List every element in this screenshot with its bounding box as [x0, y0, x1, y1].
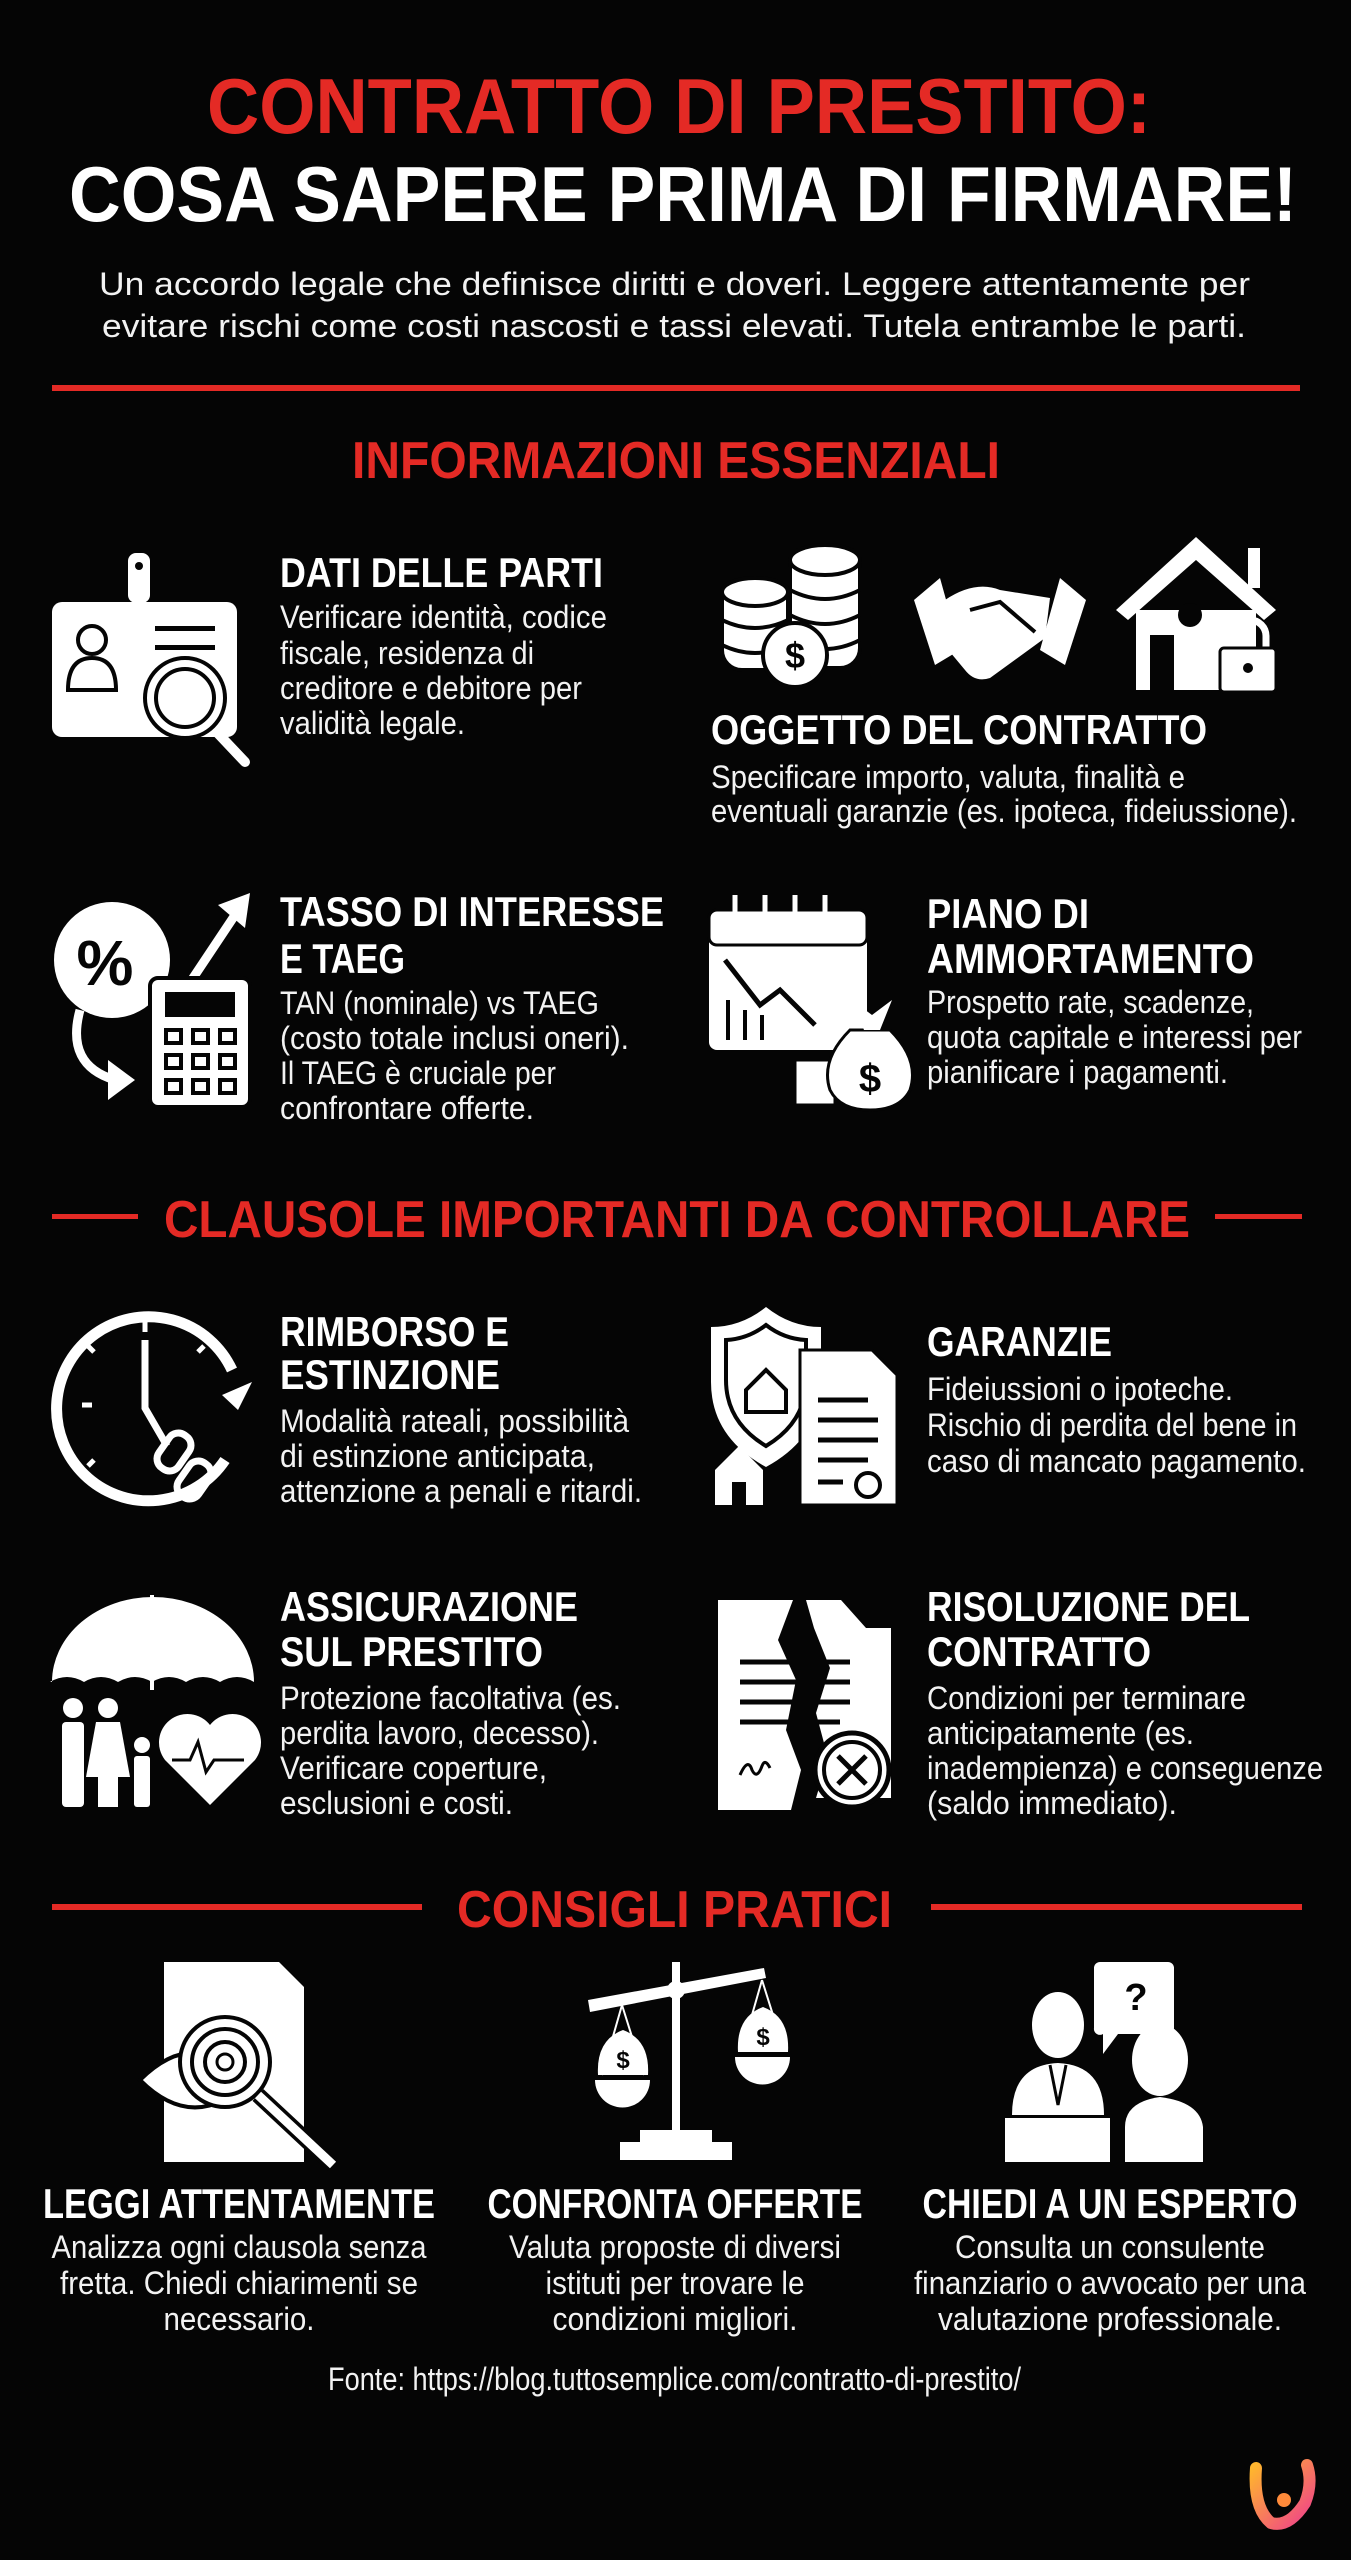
text: fretta. Chiedi chiarimenti se — [60, 2265, 418, 2301]
text — [927, 984, 1302, 1090]
icon: shield house document — [711, 1307, 897, 1505]
title: CONTRATTO DI PRESTITO: — [207, 62, 1151, 150]
text: quota capitale e interessi per — [927, 1019, 1302, 1055]
heading: OGGETTO DEL CONTRATTO — [711, 706, 1207, 753]
panel: dati delle parti — [52, 549, 607, 762]
text: TAN (nominale) vs TAEG — [280, 985, 599, 1021]
text: Analizza ogni clausola senza — [52, 2229, 427, 2265]
heading: RISOLUZIONE DEL — [927, 1583, 1250, 1630]
panel: garanzie — [711, 1307, 1306, 1505]
text — [711, 759, 1297, 829]
text: perdita lavoro, decesso). — [280, 1715, 599, 1751]
text: Il TAEG è cruciale per — [280, 1055, 556, 1091]
icon: consultant and client — [1005, 1962, 1203, 2162]
text: Verificare identità, codice — [280, 599, 607, 635]
icon: calendar chart money bag — [709, 895, 912, 1110]
icon: id card — [52, 553, 245, 762]
heading: LEGGI ATTENTAMENTE — [43, 2180, 435, 2227]
icon: umbrella family heart — [50, 1595, 261, 1807]
heading — [280, 1308, 509, 1398]
text: pianificare i pagamenti. — [927, 1054, 1228, 1090]
panel: oggetto del contratto — [711, 537, 1297, 829]
panel: confronta offerte — [488, 1962, 862, 2337]
icon: house with lock — [1116, 537, 1276, 692]
source footer: Fonte: https://blog.tuttosemplice.com/contratto-di-prestito/ — [328, 2361, 1021, 2397]
heading: GARANZIE — [927, 1318, 1112, 1365]
heading: ESTINZIONE — [280, 1351, 500, 1398]
icon: clock with broken chain — [57, 1317, 252, 1503]
heading: RIMBORSO E — [280, 1308, 509, 1355]
section heading: consigli pratici — [52, 1881, 1302, 1939]
text: istituti per trovare le — [546, 2265, 804, 2301]
heading: PIANO DI — [927, 890, 1089, 937]
panel: leggi attentamente — [43, 1962, 435, 2337]
icon: scales with money bags: $ — [616, 2047, 630, 2074]
text: necessario. — [164, 2301, 314, 2337]
text: Modalità rateali, possibilità — [280, 1403, 629, 1439]
text — [509, 2229, 841, 2337]
title — [69, 62, 1297, 238]
text: fiscale, residenza di — [280, 635, 534, 671]
heading — [927, 890, 1254, 982]
text: Fideiussioni o ipoteche. — [927, 1371, 1233, 1407]
text: eventuali garanzie (es. ipoteca, fideiussione). — [711, 793, 1297, 829]
icon: coins: $ — [785, 635, 805, 676]
icon: percent calculator — [54, 893, 250, 1107]
heading: SUL PRESTITO — [280, 1628, 543, 1675]
text: Specificare importo, valuta, finalità e — [711, 759, 1185, 795]
text: condizioni migliori. — [552, 2301, 798, 2337]
text: finanziario o avvocato per una — [914, 2265, 1306, 2301]
text: Consulta un consulente — [955, 2229, 1265, 2265]
heading: CONFRONTA OFFERTE — [488, 2180, 862, 2227]
text: caso di mancato pagamento. — [927, 1443, 1306, 1479]
panel: tasso di interesse — [54, 888, 664, 1126]
heading: ASSICURAZIONE — [280, 1583, 578, 1630]
text — [914, 2229, 1306, 2337]
icon: calendar chart money bag: $ — [859, 1057, 881, 1101]
heading: CONTRATTO — [927, 1628, 1151, 1675]
text: esclusioni e costi. — [280, 1785, 513, 1821]
icon: coins — [722, 545, 860, 687]
text: attenzione a penali e ritardi. — [280, 1473, 642, 1509]
text — [52, 2229, 427, 2337]
panel: rimborso e estinzione — [57, 1308, 642, 1509]
heading: E TAEG — [280, 935, 405, 982]
text — [280, 1403, 642, 1509]
section heading: consigli pratici: CONSIGLI PRATICI — [457, 1881, 892, 1939]
text: creditore e debitore per — [280, 670, 582, 706]
text — [280, 1680, 621, 1821]
text — [280, 599, 607, 741]
text — [927, 1680, 1323, 1821]
section heading: clausole importanti: CLAUSOLE IMPORTANTI DA CONTROLLARE — [164, 1191, 1190, 1249]
logo — [1256, 2465, 1310, 2524]
heading — [927, 1583, 1250, 1675]
text: Condizioni per terminare — [927, 1680, 1246, 1716]
text: Rischio di perdita del bene in — [927, 1407, 1297, 1443]
text: Protezione facoltativa (es. — [280, 1680, 621, 1716]
text: confrontare offerte. — [280, 1090, 534, 1126]
subtitle: Un accordo legale che definisce diritti e doveri. Leggere attentamente per — [99, 266, 1250, 302]
section heading: informazioni essenziali: INFORMAZIONI ESSENZIALI — [352, 432, 1000, 490]
icon: torn document — [718, 1600, 891, 1810]
text: di estinzione anticipata, — [280, 1438, 595, 1474]
text — [280, 985, 629, 1126]
text: Prospetto rate, scadenze, — [927, 984, 1254, 1020]
text: Valuta proposte di diversi — [509, 2229, 841, 2265]
icon: percent calculator: % — [77, 927, 133, 999]
subtitle: evitare rischi come costi nascosti e tassi elevati. Tutela entrambe le parti. — [102, 308, 1246, 344]
text: valutazione professionale. — [938, 2301, 1282, 2337]
subtitle — [99, 266, 1250, 344]
text: validità legale. — [280, 705, 465, 741]
heading: TASSO DI INTERESSE — [280, 888, 664, 935]
text: Verificare coperture, — [280, 1750, 547, 1786]
icon: document eye magnifier — [140, 1962, 333, 2165]
panel: piano di ammortamento — [709, 890, 1302, 1110]
panel: chiedi a un esperto — [914, 1962, 1306, 2337]
heading — [280, 888, 664, 982]
text: (saldo immediato). — [927, 1785, 1177, 1821]
panel: assicurazione — [50, 1583, 621, 1821]
panel: risoluzione del contratto — [718, 1583, 1323, 1821]
text: inadempienza) e conseguenze — [927, 1750, 1323, 1786]
icon: scales with money bags — [588, 1962, 790, 2160]
heading: AMMORTAMENTO — [927, 935, 1254, 982]
icon: handshake — [914, 578, 1086, 679]
text: anticipatamente (es. — [927, 1715, 1194, 1751]
icon: consultant and client: ? — [1124, 1977, 1148, 2019]
text: (costo totale inclusi oneri). — [280, 1020, 629, 1056]
heading: DATI DELLE PARTI — [280, 549, 603, 596]
heading — [280, 1583, 578, 1675]
icon: scales with money bags: $ — [756, 2024, 770, 2051]
text — [927, 1371, 1306, 1479]
